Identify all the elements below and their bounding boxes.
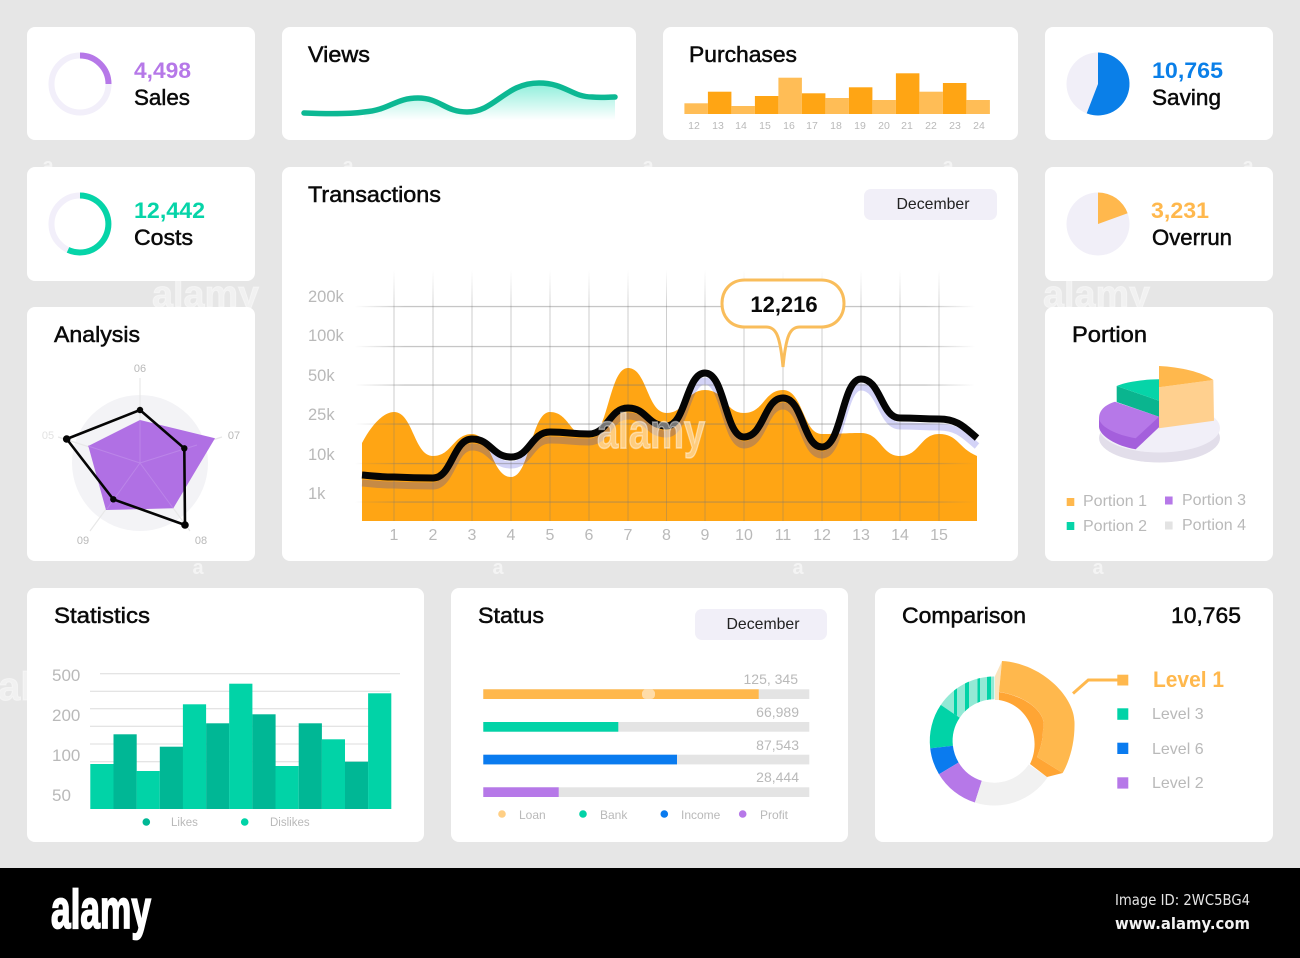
watermarks on background: alamy <box>152 274 259 316</box>
y axis labels: 200k <box>308 288 345 306</box>
legend: comparison: Level 3 <box>1152 706 1204 723</box>
x axis labels <box>390 527 948 544</box>
area chart: views <box>304 83 615 120</box>
x axis labels: 7 <box>624 527 633 544</box>
legend: statistics: Likes <box>171 817 198 829</box>
y axis labels: 1k <box>308 485 326 503</box>
costs label: Costs <box>134 225 193 250</box>
y axis labels: statistics <box>52 666 80 805</box>
axis labels: purchases: 17 <box>806 120 818 132</box>
progress bars: 87,543 <box>756 737 799 753</box>
x axis labels: 4 <box>507 527 516 544</box>
x axis labels: 2 <box>429 527 438 544</box>
y axis labels: statistics: 50 <box>52 786 71 805</box>
watermarks on background: a <box>942 155 954 177</box>
x axis labels: 1 <box>390 527 399 544</box>
line series: black <box>362 373 977 478</box>
heading: comparison: Comparison <box>902 603 1026 628</box>
heading: status: Status <box>478 603 544 628</box>
panel: sales <box>27 27 255 140</box>
heading: statistics: Statistics <box>54 603 150 628</box>
panel: status <box>451 588 848 842</box>
axis labels: purchases: 21 <box>901 120 913 132</box>
radar chart <box>42 363 240 547</box>
month selector: status: December <box>726 616 800 633</box>
watermarks on background: a <box>492 557 504 579</box>
legend: status: Loan <box>519 808 546 822</box>
x axis labels: 8 <box>662 527 671 544</box>
x axis labels: 11 <box>775 527 791 544</box>
radar chart: 08 <box>195 535 207 547</box>
watermarks on background: a <box>1242 155 1254 177</box>
panel: views <box>282 27 636 140</box>
x axis labels: 6 <box>585 527 594 544</box>
panel: costs <box>27 167 255 281</box>
progress bars: 66,989 <box>756 704 799 720</box>
watermarks on background: a <box>342 155 354 177</box>
watermarks on background: a <box>642 155 654 177</box>
y axis labels: statistics: 100 <box>52 746 80 765</box>
x axis labels: 13 <box>852 527 870 544</box>
month selector <box>864 189 997 220</box>
legend: portion <box>1067 492 1246 535</box>
comparison total: 10,765 <box>1171 603 1241 628</box>
bar chart: purchases <box>684 73 990 114</box>
y axis labels: 100k <box>308 327 345 345</box>
footer logo: alamy <box>51 878 151 940</box>
watermarks on background: a <box>42 155 54 177</box>
icon: costs donut <box>52 196 108 252</box>
legend: portion: Portion 2 <box>1083 518 1147 535</box>
image id: Image ID: 2WC5BG4 <box>1115 891 1250 909</box>
legend: status: Bank <box>600 808 628 822</box>
heading: portion: Portion <box>1072 322 1147 347</box>
panel: transactions <box>282 167 1018 561</box>
axis labels: purchases: 19 <box>854 120 866 132</box>
legend: portion: Portion 4 <box>1182 517 1246 534</box>
legend: portion: Portion 1 <box>1083 493 1147 510</box>
x axis labels: 3 <box>468 527 477 544</box>
legend: comparison <box>1117 667 1224 792</box>
radar chart: 07 <box>228 430 240 442</box>
legend: status: Profit <box>760 808 789 822</box>
saving value: 10,765 <box>1152 58 1223 83</box>
icon: overrun pie <box>1066 192 1130 256</box>
radar chart: 06 <box>134 363 146 375</box>
heading: transactions: Transactions <box>308 182 441 207</box>
sales label: Sales <box>134 85 190 110</box>
axis labels: purchases: 14 <box>735 120 747 132</box>
axis labels: purchases: 15 <box>759 120 771 132</box>
overrun value: 3,231 <box>1151 198 1209 223</box>
progress bars <box>483 671 809 797</box>
y axis labels: statistics: 500 <box>52 666 80 685</box>
x axis labels: 9 <box>701 527 710 544</box>
footer band <box>0 868 1300 958</box>
radar chart: 05 <box>42 430 54 442</box>
watermarks on background: a <box>792 557 804 579</box>
watermarks on background <box>0 155 1254 709</box>
callout: 12,216: 12,216 <box>750 292 818 317</box>
area chart: transactions <box>355 270 977 521</box>
axis labels: purchases: 24 <box>973 120 985 132</box>
heading: analysis: Analysis <box>54 322 140 347</box>
costs value: 12,442 <box>134 198 205 223</box>
axis labels: purchases: 18 <box>830 120 842 132</box>
legend: status <box>498 808 789 822</box>
panel: portion <box>1045 307 1273 561</box>
y axis labels <box>308 288 345 503</box>
legend: comparison: Level 1 <box>1153 667 1224 692</box>
icon: saving pie <box>1066 52 1130 116</box>
panel: purchases <box>663 27 1018 140</box>
axis labels: purchases: 16 <box>783 120 795 132</box>
y axis labels: statistics: 200 <box>52 706 80 725</box>
sales value: 4,498 <box>134 58 191 83</box>
icon: sales donut <box>52 56 108 112</box>
overrun label: Overrun <box>1152 225 1232 250</box>
progress bars: 125, 345 <box>744 671 798 687</box>
watermarks on background: alamy <box>1043 274 1150 316</box>
panel: comparison <box>875 588 1273 842</box>
axis labels: purchases <box>688 120 985 132</box>
watermark: center: alamy <box>597 405 705 459</box>
x axis labels: 10 <box>735 527 753 544</box>
axis labels: purchases: 20 <box>878 120 890 132</box>
axis labels: purchases: 22 <box>925 120 937 132</box>
axis labels: purchases: 23 <box>949 120 961 132</box>
connector arrow <box>1073 680 1118 694</box>
month selector: December <box>896 196 970 213</box>
legend: comparison: Level 6 <box>1152 741 1204 758</box>
legend: status: Income <box>681 808 721 822</box>
panel: analysis <box>27 307 255 561</box>
website: www.alamy.com <box>1115 914 1250 933</box>
panel: statistics <box>27 588 424 842</box>
x axis labels: 14 <box>891 527 909 544</box>
panel: overrun <box>1045 167 1273 281</box>
y axis labels: 10k <box>308 446 335 464</box>
legend: portion: Portion 3 <box>1182 492 1246 509</box>
y axis labels: 25k <box>308 406 335 424</box>
callout: 12,216 <box>722 280 844 367</box>
heading: views: Views <box>308 42 370 67</box>
x axis labels: 5 <box>546 527 555 544</box>
axis labels: purchases: 12 <box>688 120 700 132</box>
x axis labels: 12 <box>813 527 831 544</box>
y axis labels: 50k <box>308 367 335 385</box>
progress bars: 28,444 <box>756 769 799 785</box>
watermarks on background: a <box>192 557 204 579</box>
donut chart <box>930 661 1075 806</box>
watermarks on background: a <box>1092 557 1104 579</box>
x axis labels: 15 <box>930 527 948 544</box>
legend: statistics <box>142 817 310 829</box>
legend: statistics: Dislikes <box>270 817 310 829</box>
watermark spot on loan bar <box>642 689 655 699</box>
bar chart: statistics <box>90 674 400 809</box>
axis labels: purchases: 13 <box>712 120 724 132</box>
heading: purchases: Purchases <box>689 42 797 67</box>
saving label: Saving <box>1152 85 1221 110</box>
panel: saving <box>1045 27 1273 140</box>
legend: comparison: Level 2 <box>1152 775 1204 792</box>
month selector: status <box>695 609 827 640</box>
radar chart: 09 <box>77 535 89 547</box>
3d pie chart <box>1099 366 1220 462</box>
